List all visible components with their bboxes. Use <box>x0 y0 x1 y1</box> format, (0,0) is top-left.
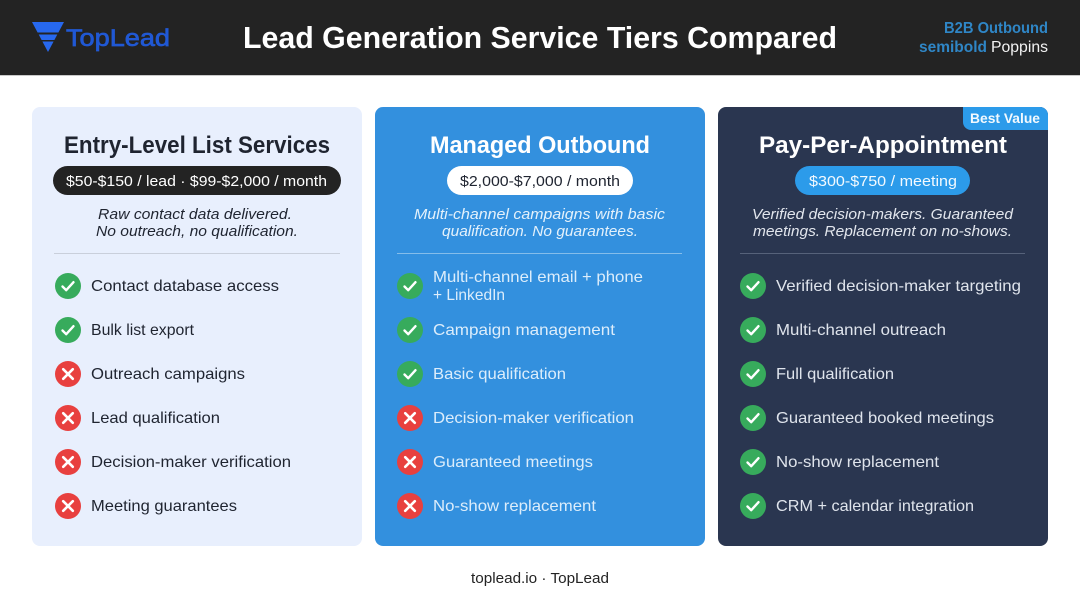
feature: basic qualification <box>397 361 566 387</box>
heading: Managed Outbound <box>430 132 650 159</box>
description: Raw contact data delivered. <box>98 207 292 223</box>
feature: bulk list export <box>55 317 195 343</box>
feature list <box>740 273 1021 519</box>
header tagline: semibold <box>919 39 987 56</box>
feature: guaranteed booked meetings: Guaranteed booked meetings <box>776 410 994 427</box>
description <box>414 207 666 240</box>
price pill: $50-$150 / lead · $99-$2,000 / month <box>66 173 327 190</box>
panel: Pay-Per-Appointment <box>718 107 1048 546</box>
description: qualification. No guarantees. <box>442 224 638 240</box>
price pill <box>53 166 341 195</box>
description <box>752 207 1014 240</box>
feature: decision-maker verification: Decision-maker verification <box>91 454 291 471</box>
feature: multi-channel outreach <box>740 317 946 343</box>
feature: outreach campaigns <box>55 361 245 387</box>
feature: lead qualification: Lead qualification <box>91 410 220 427</box>
feature: no-show replacement <box>397 493 597 519</box>
panel: Managed Outbound <box>375 107 705 546</box>
feature: campaign management <box>397 317 616 343</box>
description: Verified decision-makers. Guaranteed <box>752 207 1014 223</box>
feature: bulk list export: Bulk list export <box>91 322 195 339</box>
feature: multi-channel outreach: Multi-channel outreach <box>776 322 946 339</box>
feature: multi-channel email, phone, LinkedIn: Multi-channel email + phone <box>433 269 643 286</box>
panel: Entry-Level List Services <box>32 107 362 546</box>
feature: decision-maker verification: Decision-maker verification <box>433 410 634 427</box>
footer: toplead.io · TopLead <box>471 570 609 587</box>
badge: Best Value: Best Value <box>970 111 1040 126</box>
description: No outreach, no qualification. <box>96 224 298 240</box>
feature: contact database access: Contact database access <box>91 278 279 295</box>
heading: Pay-Per-Appointment <box>759 132 1007 159</box>
title: Lead Generation Service Tiers Compared <box>243 20 837 55</box>
price pill: $2,000-$7,000 / month <box>460 173 620 190</box>
price pill: $300-$750 / meeting <box>809 173 957 190</box>
price pill <box>447 166 633 195</box>
feature: verified decision-maker targeting <box>740 273 1021 299</box>
feature: CRM + calendar integration: CRM + calendar integration <box>776 498 974 515</box>
header tagline: B2B Outbound <box>944 20 1048 37</box>
feature: multi-channel email, phone, LinkedIn <box>397 269 643 304</box>
feature: campaign management: Campaign management <box>433 322 616 339</box>
feature: CRM + calendar integration <box>740 493 974 519</box>
price pill <box>795 166 970 195</box>
header tagline: Poppins <box>991 39 1048 56</box>
feature: decision-maker verification <box>397 405 634 431</box>
feature: full qualification <box>740 361 894 387</box>
heading: Entry-Level List Services <box>64 132 330 159</box>
feature: full qualification: Full qualification <box>776 366 894 383</box>
feature: outreach campaigns: Outreach campaigns <box>91 366 245 383</box>
logo: TopLead: TopLead <box>66 25 170 52</box>
feature list <box>397 269 643 519</box>
header bar <box>0 0 1080 76</box>
feature: no-show replacement: No-show replacement <box>433 498 597 515</box>
description: meetings. Replacement on no-shows. <box>753 224 1012 240</box>
icon: stacked funnel triangle <box>32 22 64 52</box>
feature: decision-maker verification <box>55 449 291 475</box>
feature: multi-channel email, phone, LinkedIn: + LinkedIn <box>433 287 505 304</box>
header tagline <box>919 20 1048 56</box>
feature: guaranteed booked meetings <box>740 405 994 431</box>
feature: basic qualification: Basic qualification <box>433 366 566 383</box>
feature: no-show replacement <box>740 449 940 475</box>
feature: lead qualification <box>55 405 220 431</box>
feature: verified decision-maker targeting: Verified decision-maker targeting <box>776 278 1021 295</box>
feature: meeting guarantees: Meeting guarantees <box>91 498 237 515</box>
feature: no-show replacement: No-show replacement <box>776 454 940 471</box>
feature: guaranteed meetings: Guaranteed meetings <box>433 454 593 471</box>
description: Multi-channel campaigns with basic <box>414 207 666 223</box>
feature: contact database access <box>55 273 279 299</box>
feature: guaranteed meetings <box>397 449 593 475</box>
feature list <box>55 273 291 519</box>
logo: TopLead <box>32 22 170 52</box>
feature: meeting guarantees <box>55 493 237 519</box>
description <box>96 207 298 240</box>
badge: Best Value <box>963 107 1048 130</box>
